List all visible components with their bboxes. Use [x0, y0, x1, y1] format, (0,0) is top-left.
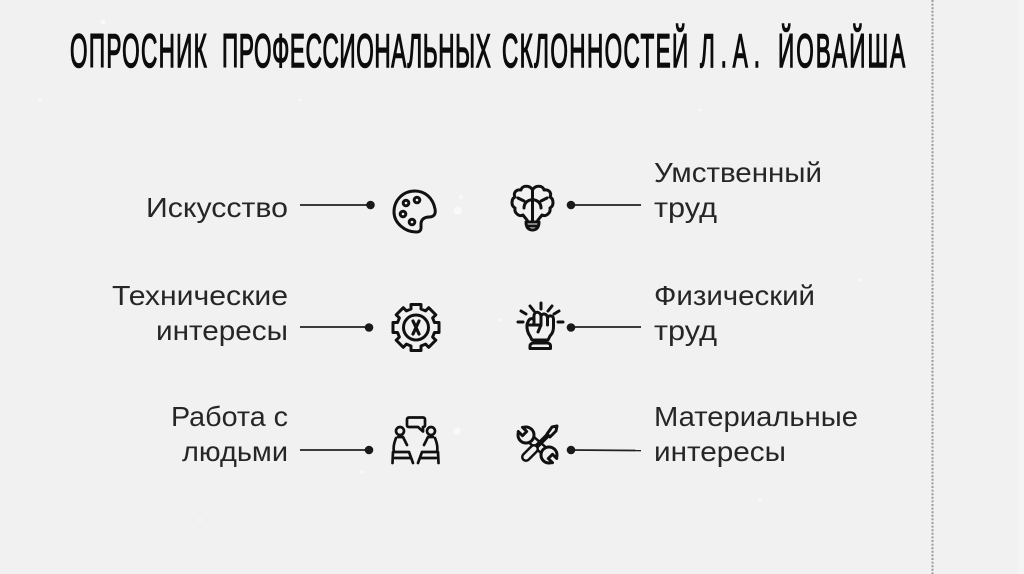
item: Материальные интересы: Материальные	[654, 401, 858, 432]
title: ЙОВАЙША	[778, 24, 905, 77]
item: Технические интересы	[112, 280, 439, 350]
title	[70, 24, 905, 77]
icon: two people talking	[392, 418, 438, 463]
item: Искусство: Искусство	[146, 192, 288, 223]
icon: palette	[394, 191, 435, 232]
title: ПРОФЕССИОНАЛЬНЫХ	[222, 25, 491, 77]
item: Умственный труд: труд	[654, 192, 717, 223]
item: Умственный труд	[512, 157, 822, 230]
icon: gear	[393, 304, 439, 350]
item: Физический труд	[518, 280, 815, 348]
item: Физический труд: труд	[654, 315, 717, 346]
item: Материальные интересы: интересы	[654, 436, 786, 467]
item: Искусство	[146, 191, 435, 232]
title: СКЛОННОСТЕЙ	[502, 24, 688, 77]
icon: brain with bulb	[512, 186, 553, 230]
icon: raised fist	[518, 303, 563, 348]
item: Работа с людьми	[171, 401, 438, 467]
item: Технические интересы: Технические	[112, 280, 288, 311]
item: Работа с людьми: Работа с	[171, 401, 288, 432]
item: Технические интересы: интересы	[156, 315, 288, 346]
item: Умственный труд: Умственный	[654, 157, 822, 188]
item: Работа с людьми: людьми	[182, 436, 288, 467]
title: Л.А.	[700, 25, 760, 77]
item: Материальные интересы	[513, 401, 858, 467]
title: ОПРОСНИК	[70, 25, 207, 77]
icon: wrench and screwdriver	[513, 423, 561, 467]
item: Физический труд: Физический	[654, 280, 815, 311]
